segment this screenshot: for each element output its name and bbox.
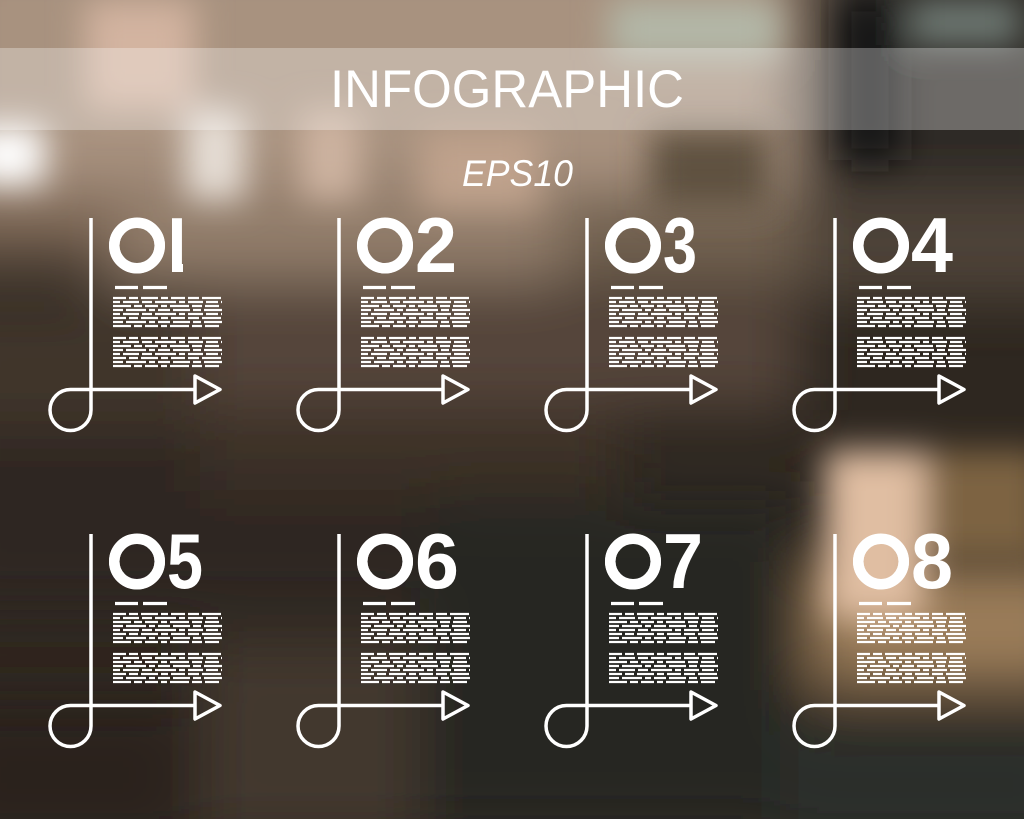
item 07: 7 — [663, 517, 703, 605]
item 02: 2 — [415, 201, 457, 289]
item 03: 3 — [663, 201, 697, 289]
item 08: 0 — [844, 518, 918, 608]
item 07 — [546, 517, 718, 746]
item 01: 0 — [100, 202, 174, 292]
item 04 — [794, 201, 966, 430]
item 02: 0 — [348, 202, 422, 292]
item 05 — [50, 517, 222, 746]
item 01: 1 — [153, 201, 196, 289]
item 06: 6 — [415, 517, 459, 605]
item 07: 0 — [596, 518, 670, 608]
title: INFOGRAPHIC — [330, 60, 684, 119]
item 05: 0 — [100, 518, 174, 608]
item 03 — [546, 201, 718, 430]
item 01 — [50, 201, 222, 430]
subtitle: EPS10 — [462, 153, 573, 194]
item 05: 5 — [167, 517, 203, 605]
title band — [0, 48, 1024, 130]
item 02 — [298, 201, 470, 430]
item 04: 0 — [844, 202, 918, 292]
item 06 — [298, 517, 470, 746]
item 04: 4 — [911, 201, 953, 289]
item 06: 0 — [348, 518, 422, 608]
item 08: 8 — [911, 517, 953, 605]
item 08 — [794, 517, 966, 746]
item 03: 0 — [596, 202, 670, 292]
